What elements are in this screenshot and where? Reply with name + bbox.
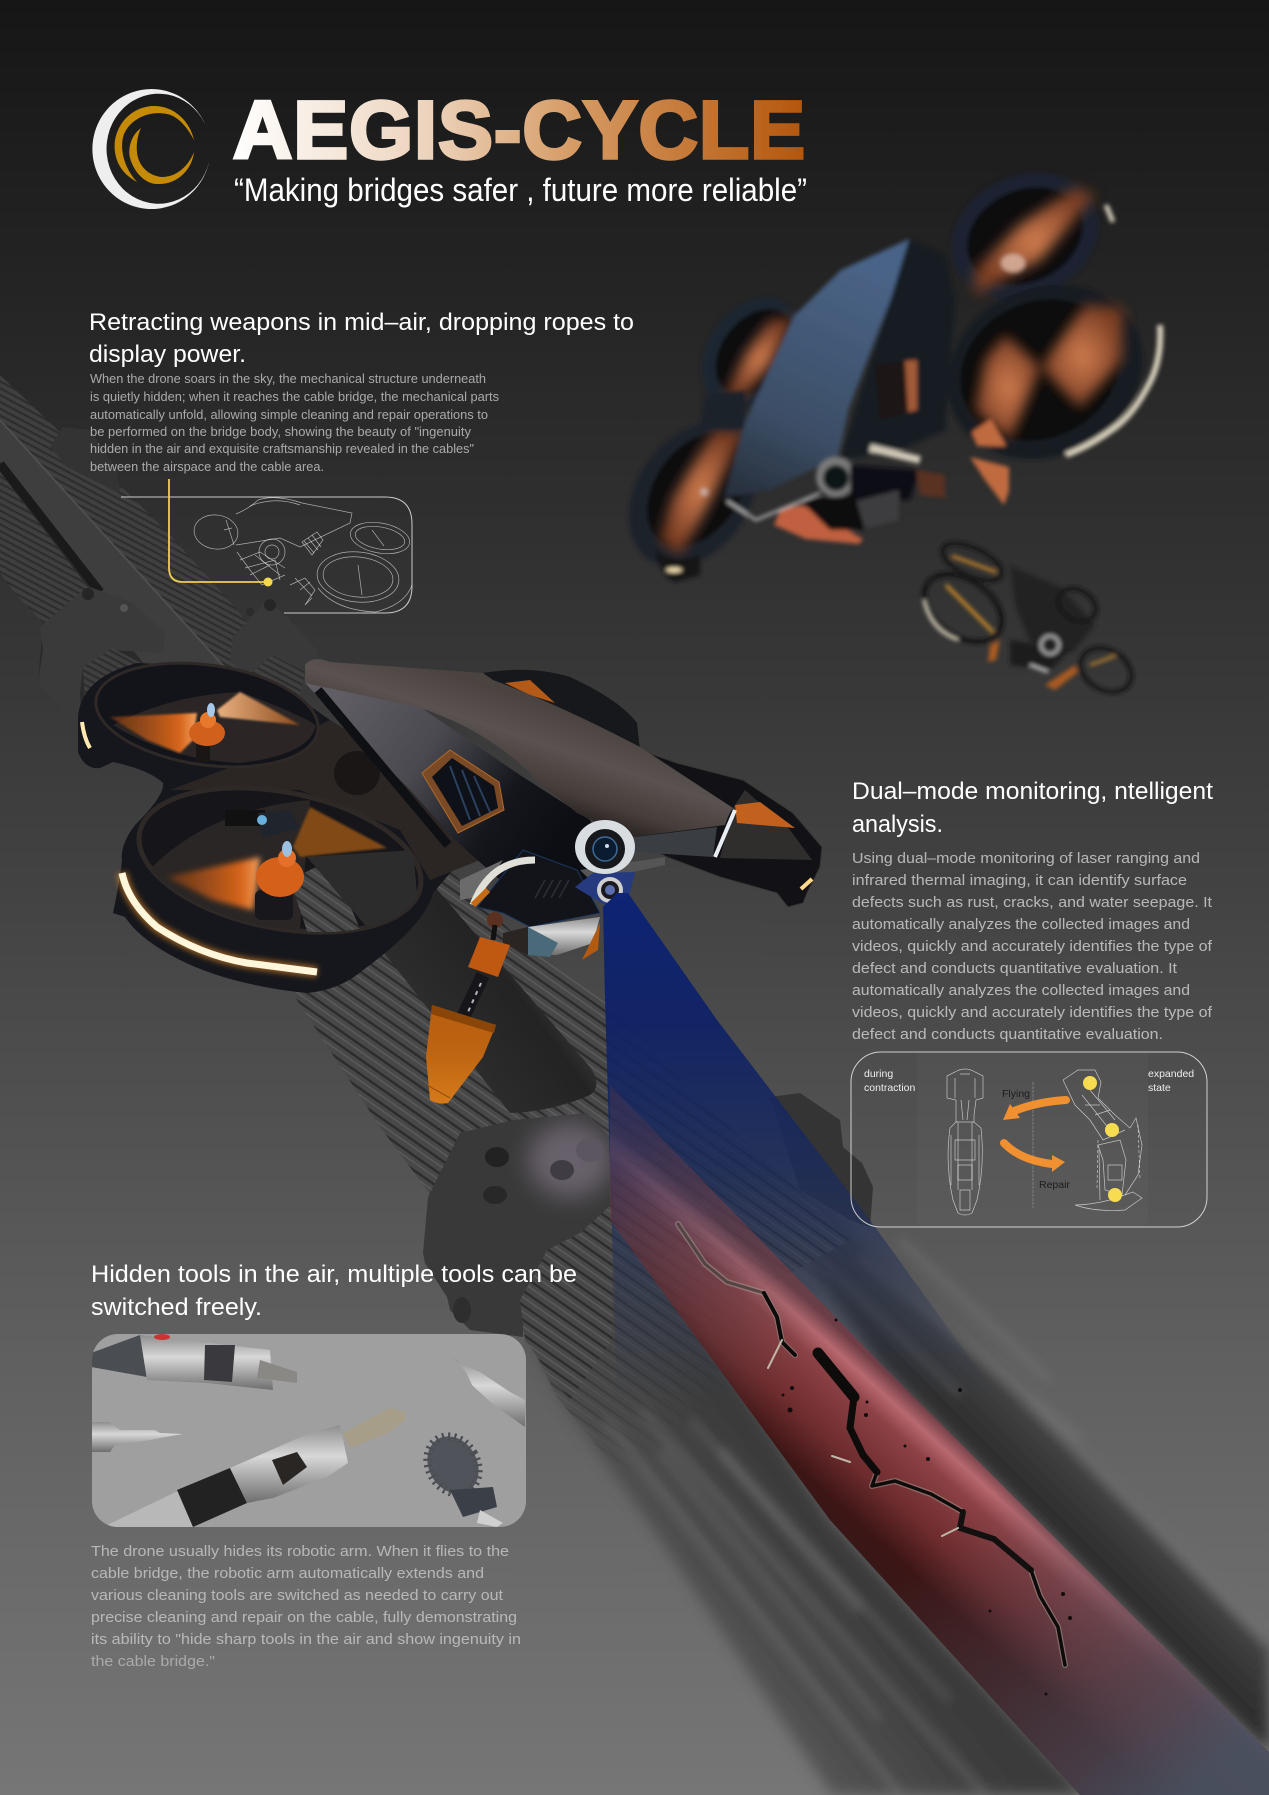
debris specks [782,1318,1072,1696]
body text [852,850,1213,1043]
camera lens [575,820,635,874]
gimbal box [460,850,600,960]
panel: dual-mode monitoring [851,778,1213,1227]
crack in cable sheath [678,1224,1065,1665]
black protective tube [311,850,596,1113]
tools photo [91,1334,526,1527]
label: expanded state: expanded [1148,1068,1194,1080]
heading: Dual–mode monitoring, ntelligent [852,778,1213,805]
upper-left ring [682,279,822,427]
body text: precise cleaning and repair on the cable, fully demonstrating [91,1609,517,1626]
main drone over the cable [78,650,822,1104]
body text: defect and conducts quantitative evaluation. It [852,960,1178,977]
air vent with orange edge [422,750,504,833]
illustration: steel cable bridge stay [0,375,1269,1795]
arrow: to flying [1003,1100,1066,1120]
label: expanded state: state [1148,1082,1171,1094]
right rear ring [483,670,640,750]
heading: Retracting weapons in mid–air, dropping ropes to [89,309,634,336]
arm contracted line drawing [947,1069,983,1215]
camera mount [575,857,665,905]
label: flying: Flying [1002,1088,1030,1100]
heading [852,778,1213,838]
frame hole [334,751,380,795]
body [1010,566,1095,653]
divider [1032,1082,1034,1208]
tool: right needle [453,1358,525,1427]
body text: The drone usually hides its robotic arm. When it flies to the [91,1543,509,1560]
translucent red heat-map over damaged cable [610,1085,1269,1795]
yellow joints [1083,1076,1122,1202]
right front ring with blade [635,750,822,907]
diagram frame [851,1052,1207,1227]
arm expanded line drawing [1063,1070,1142,1210]
heading: switched freely. [91,1294,262,1321]
lower blurred strand bundle [527,1170,1269,1795]
heading: analysis. [852,811,943,838]
yellow callout line [169,479,268,582]
central body [840,239,955,460]
tool: left needle [91,1422,183,1452]
front ring [912,560,1014,656]
tool hatch [875,360,917,420]
yellow dot [264,578,272,586]
logo gold crescents [115,106,194,182]
blue shell [724,239,909,498]
heading: display power. [89,341,246,368]
body text: between the airspace and the cable area. [90,460,324,474]
front ring light strip [122,873,317,972]
lower-left tip [655,550,700,582]
body text: videos, quickly and accurately identifies the type of [852,938,1213,955]
inspection light beam [603,893,1000,1400]
drone line drawing [192,498,412,612]
body text: videos, quickly and accurately identifies the type of [852,1004,1213,1021]
body text: various cleaning tools are switched as needed to carry out [91,1587,504,1604]
upper-left twisted cables [0,375,317,770]
diagram backing [917,1053,1148,1226]
centre plate [170,720,480,880]
heading [89,309,634,368]
front left rotor ring [136,790,424,934]
tool: capped driver [91,1334,297,1390]
body text: infrared thermal imaging, it can identify surface [852,872,1187,889]
body text: the cable bridge." [91,1653,215,1670]
large hovering drone, blurred [602,150,1171,591]
small flying drone, blurred [912,536,1139,701]
label: expanded state [1148,1068,1194,1094]
label: during contraction [864,1068,916,1094]
panel: retracting weapons [89,309,634,613]
body text: defects such as rust, cracks, and water seepage. It [852,894,1213,911]
body text [91,1543,521,1670]
panel: hidden tools [91,1261,577,1670]
black strut [318,690,448,845]
body text [90,372,499,474]
robotic arm and claw [426,912,510,1104]
near strand rope [296,872,690,1448]
rope under the beam top [600,1000,850,1290]
upper-right clamp [770,1093,873,1227]
label: during contraction: contraction [864,1082,916,1094]
body text: is quietly hidden; when it reaches the cable bridge, the mechanical parts [90,390,499,404]
gimbal and orange parts [988,636,1078,690]
rear left rotor ring [89,650,325,780]
tagline: “Making bridges safer , future more reliable” [234,172,807,208]
rear ring light strip [82,722,90,748]
body text: When the drone soars in the sky, the mechanical structure underneath [90,372,486,386]
heading: Hidden tools in the air, multiple tools can be [91,1261,577,1288]
tool: main driver [103,1408,405,1527]
body text: be performed on the bridge body, showing the beauty of "ingenuity [90,425,472,439]
arrow: to repair [1004,1143,1065,1172]
logo white crescent [92,89,209,209]
big cable clamp with bolts [423,1113,613,1400]
top shell [305,659,733,837]
heading [91,1261,577,1321]
body text: its ability to "hide sharp tools in the air and show ingenuity in [91,1631,521,1648]
body text: cable bridge, the robotic arm automatically extends and [91,1565,484,1582]
body text: Using dual–mode monitoring of laser ranging and [852,850,1200,867]
logo mark [92,89,209,209]
label: repair: Repair [1039,1179,1070,1191]
right glossy cheek [625,827,717,857]
top-right ring [931,150,1119,322]
title: AEGIS-CYCLE [233,85,805,176]
lens [816,457,856,497]
body text: automatically unfold, allowing simple cleaning and repair operations to [90,408,488,422]
body text: hidden in the air and exquisite craftsmanship revealed in the cables" [90,442,474,456]
body text: automatically analyzes the collected images and [852,916,1190,933]
tool: brush [423,1432,503,1527]
big right ring [919,254,1171,505]
body text: automatically analyzes the collected images and [852,982,1190,999]
rear ring [937,536,1007,588]
right rings [1052,582,1139,701]
drawing frame [121,497,412,613]
body text: defect and conducts quantitative evaluation. [852,1026,1163,1043]
glossy underbody [305,683,605,890]
lower-left ring [602,390,784,591]
underside parts [727,448,945,544]
drone frame with left rings [78,663,470,993]
label: during contraction: during [864,1068,893,1080]
white side strip [715,810,735,857]
